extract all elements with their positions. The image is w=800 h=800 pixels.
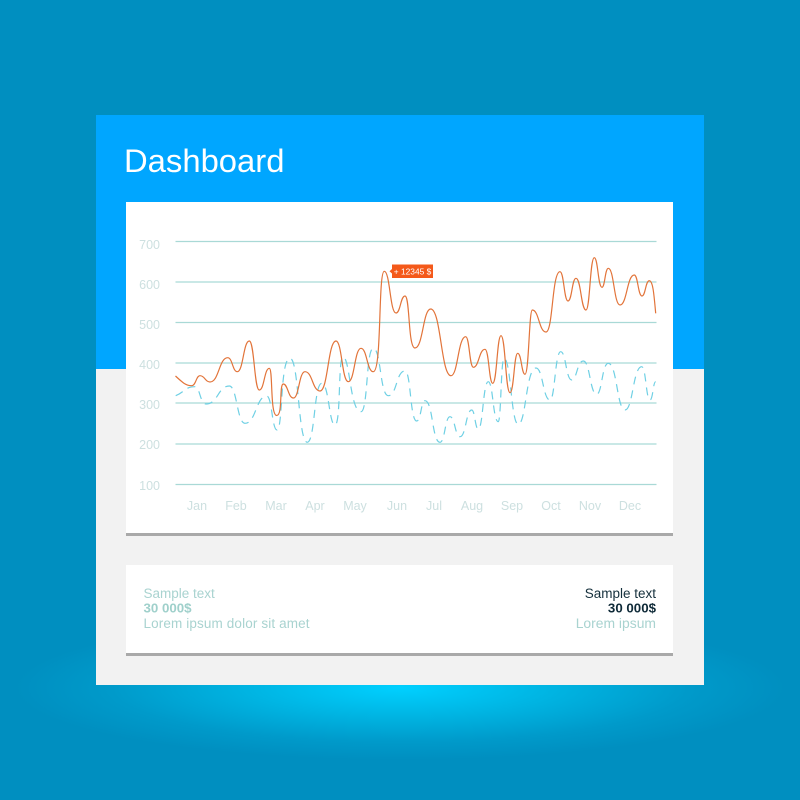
x axis labels: Aug bbox=[461, 499, 483, 513]
y axis labels: 500 bbox=[139, 318, 160, 332]
chart bbox=[139, 238, 656, 513]
x axis labels: Jun bbox=[387, 499, 407, 513]
x axis labels: Dec bbox=[619, 499, 641, 513]
x axis labels: Apr bbox=[305, 499, 325, 513]
right summary text: 30 000$ bbox=[608, 600, 657, 616]
x axis labels: Jan bbox=[187, 499, 207, 513]
right summary text: Sample text bbox=[585, 586, 656, 601]
y axis labels: 300 bbox=[139, 398, 160, 412]
y axis labels: 200 bbox=[139, 438, 160, 452]
x axis labels: Jul bbox=[426, 499, 442, 513]
panel header band bbox=[96, 115, 704, 369]
x axis labels: Oct bbox=[541, 499, 561, 513]
panel: dashboard bbox=[96, 115, 704, 685]
value tag: + 12345 $ bbox=[394, 266, 432, 276]
y axis labels: 400 bbox=[139, 358, 160, 372]
y axis labels: 600 bbox=[139, 278, 160, 292]
right summary text: Lorem ipsum bbox=[576, 615, 656, 631]
left summary text: Sample text bbox=[144, 586, 215, 601]
orange line bbox=[176, 258, 656, 416]
title: Dashboard bbox=[124, 142, 284, 179]
x axis labels: Feb bbox=[225, 499, 247, 513]
panel: summary card bbox=[126, 565, 673, 656]
left summary text: Lorem ipsum dolor sit amet bbox=[144, 616, 310, 631]
value tag bbox=[390, 264, 433, 278]
y axis labels: 100 bbox=[139, 479, 160, 493]
panel: chart card bbox=[126, 202, 673, 536]
background glow bbox=[15, 616, 785, 760]
right summary text bbox=[576, 586, 657, 631]
x axis labels: Nov bbox=[579, 499, 602, 513]
y axis labels bbox=[139, 238, 160, 493]
x axis labels: Sep bbox=[501, 499, 523, 513]
x axis labels: May bbox=[343, 499, 368, 513]
left summary text: 30 000$ bbox=[144, 600, 192, 616]
y axis labels: 700 bbox=[139, 238, 160, 252]
x axis labels: Mar bbox=[265, 499, 287, 513]
x axis labels bbox=[187, 499, 641, 513]
left summary text bbox=[144, 586, 310, 631]
dashed blue line bbox=[176, 348, 656, 442]
